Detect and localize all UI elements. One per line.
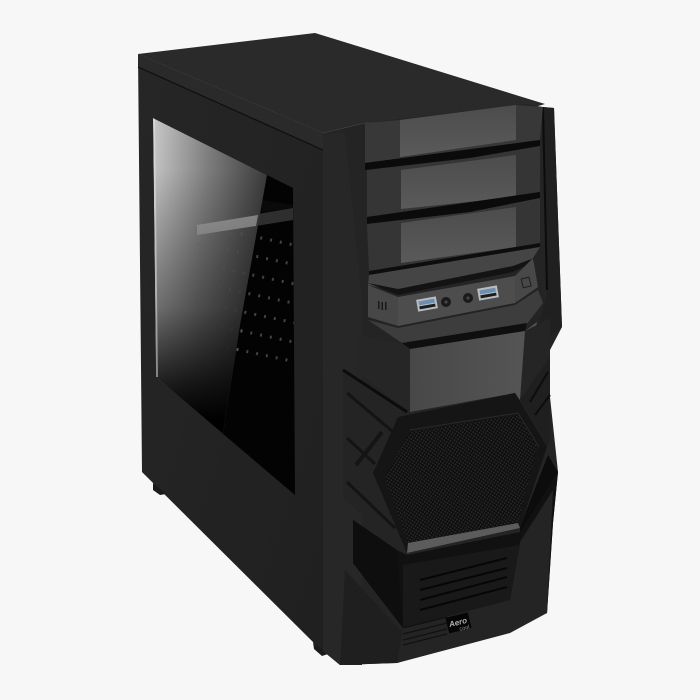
- I/O left wing: [368, 285, 398, 326]
- audio jack left: [441, 297, 451, 307]
- I/O centre plate: [398, 276, 515, 326]
- USB port right: [477, 285, 499, 301]
- panel: bottom base: [340, 570, 547, 665]
- panel: right lattice: [520, 357, 558, 540]
- lower lip: [368, 290, 543, 343]
- bay 1: [365, 105, 543, 163]
- logo: Aero Cool badge: cool: [459, 624, 470, 633]
- shelf 1: [365, 140, 540, 170]
- logo: Aero Cool badge: Aero: [447, 616, 468, 629]
- panel: drive bays: [365, 105, 543, 275]
- panel: lower block: [357, 318, 550, 412]
- I/O right wing: [515, 258, 538, 303]
- LEDs: [378, 301, 386, 310]
- window: side glass panel: [153, 118, 295, 495]
- shelf 3: [369, 243, 540, 275]
- audio jack right: [463, 293, 473, 303]
- illustration: black PC tower case: [138, 33, 562, 665]
- panel: case top: [138, 33, 545, 133]
- logo: Aero Cool badge: [445, 612, 472, 635]
- panel: left lattice: [343, 370, 407, 547]
- panel: fan mesh hexagon: [373, 393, 547, 553]
- feet: [153, 483, 166, 495]
- shelf 2: [367, 192, 540, 224]
- bay 2: [367, 146, 540, 217]
- bay 3: [367, 198, 540, 272]
- panel: side panel: [138, 54, 328, 656]
- panel: front I/O: [368, 247, 543, 349]
- panel: front fascia: [323, 104, 562, 665]
- USB port left: [416, 296, 438, 312]
- panel: lower grille: [353, 472, 558, 628]
